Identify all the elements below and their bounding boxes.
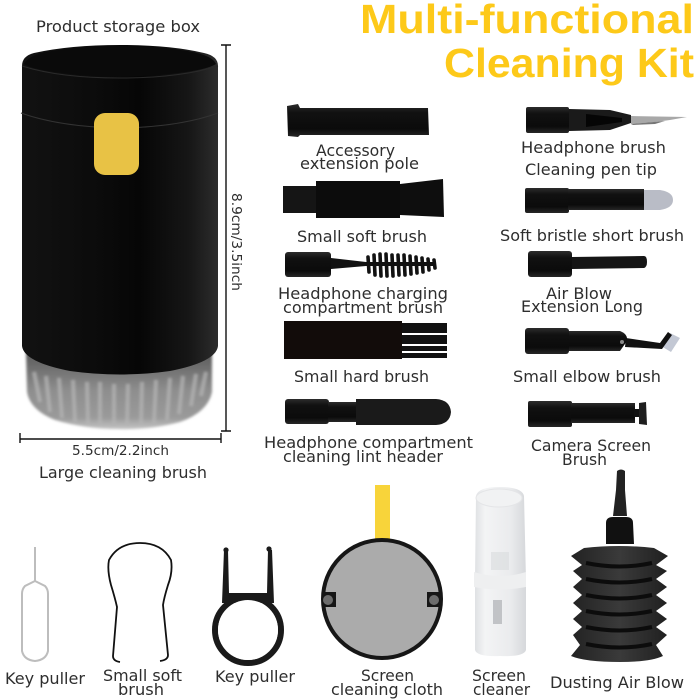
label: small soft brush: Small soft xyxy=(103,666,182,685)
label: screen cleaner: cleaner xyxy=(473,680,530,699)
label: key puller: Key puller xyxy=(215,667,295,686)
label: soft bristle short brush: Soft bristle short brush xyxy=(500,226,684,245)
dimension: height xyxy=(221,45,243,431)
icon: screen cleaner spray bottle xyxy=(474,487,526,656)
label: headphone compartment lint header: cleaning lint header xyxy=(283,447,443,466)
label: air blow extension long xyxy=(521,284,643,316)
label: camera screen brush xyxy=(531,436,651,469)
part: small hard brush xyxy=(284,321,447,359)
label: screen cleaner xyxy=(472,666,530,699)
label: headphone charging compartment brush: Headphone charging xyxy=(278,284,448,303)
part: air blow extension long xyxy=(528,251,647,277)
label: small soft brush: Small soft brush xyxy=(297,227,427,246)
label: headphone brush cleaning pen tip xyxy=(521,138,666,179)
lid top xyxy=(24,46,216,77)
part: headphone compartment lint header xyxy=(285,399,451,425)
part: headphone brush cleaning pen tip xyxy=(526,107,687,133)
label: camera screen brush: Camera Screen xyxy=(531,436,651,455)
label: small hard brush: Small hard brush xyxy=(294,367,429,386)
label: camera screen brush: Brush xyxy=(562,450,607,469)
label: accessory extension pole xyxy=(300,141,419,173)
label: headphone charging compartment brush xyxy=(278,284,448,317)
label: small soft brush: brush xyxy=(118,680,164,699)
label: dusting air blow: Dusting Air Blow xyxy=(550,673,684,692)
label: headphone brush cleaning pen tip: Cleaning pen tip xyxy=(525,160,657,179)
icon: key puller pin xyxy=(22,547,48,661)
label: accessory extension pole: Accessory xyxy=(316,141,395,160)
icon: dusting air blow xyxy=(571,470,668,662)
part: small soft brush xyxy=(283,179,444,218)
yellow slider button xyxy=(94,113,139,175)
icon: wire small soft brush xyxy=(108,543,172,662)
label: small elbow brush: Small elbow brush xyxy=(513,367,661,386)
part: soft bristle short brush xyxy=(525,188,673,213)
label: accessory extension pole: extension pole xyxy=(300,154,419,173)
label: air blow extension long: Air Blow xyxy=(546,284,612,303)
label: screen cleaning cloth xyxy=(331,666,443,699)
label: key puller: Key puller xyxy=(5,669,85,688)
icon: large cleaning brush xyxy=(21,45,218,429)
dimension: width: 5.5cm/2.2inch xyxy=(72,444,169,459)
dimension: height: 8.9cm/3.5inch xyxy=(228,193,243,291)
icon: screen cleaning cloth xyxy=(322,485,441,658)
dimension: width xyxy=(20,433,221,459)
icon: black key puller xyxy=(215,546,281,663)
label: large cleaning brush: Large cleaning brush xyxy=(39,463,207,482)
label: small soft brush xyxy=(103,666,182,699)
label: headphone charging compartment brush: compartment brush xyxy=(283,298,443,317)
part: small elbow brush xyxy=(525,328,680,354)
label: headphone brush cleaning pen tip: Headphone brush xyxy=(521,138,666,157)
part: accessory extension pole xyxy=(287,104,429,137)
label: screen cleaning cloth: Screen xyxy=(361,666,414,685)
title xyxy=(360,0,694,86)
storage box body xyxy=(22,45,218,374)
part: camera screen brush xyxy=(528,401,647,427)
label: screen cleaner: Screen xyxy=(472,666,526,685)
part: headphone charging compartment brush xyxy=(285,252,436,277)
title: Cleaning Kit xyxy=(444,40,694,86)
label: product storage box: Product storage box xyxy=(36,17,200,36)
label: headphone compartment lint header: Headphone compartment xyxy=(264,433,473,452)
label: headphone compartment lint header xyxy=(264,433,473,466)
label: screen cleaning cloth: cleaning cloth xyxy=(331,680,443,699)
label: air blow extension long: Extension Long xyxy=(521,297,643,316)
